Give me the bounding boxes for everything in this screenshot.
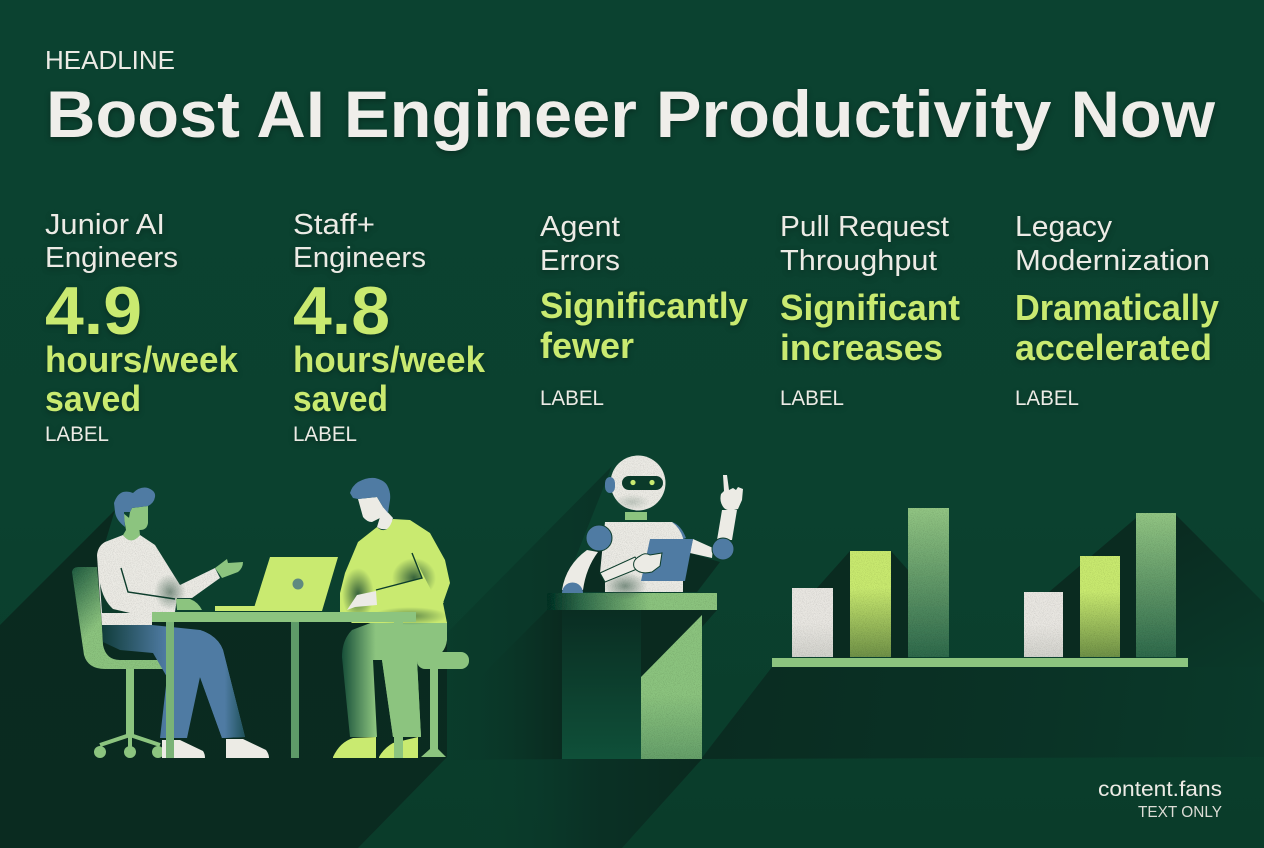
stat: legacy modernization: Modernization (1015, 245, 1210, 277)
stat: pull request throughput: LABEL (780, 387, 844, 410)
stat: staff+ engineers: LABEL (293, 423, 357, 446)
bar shadows (817, 518, 1136, 658)
bar: group one (792, 508, 949, 657)
stat: pull request throughput: Significant (780, 287, 960, 328)
stat: staff+ engineers: 4.8 (293, 273, 390, 349)
lectern (547, 593, 717, 759)
stat: agent errors: Agent (540, 211, 620, 243)
stat: pull request throughput: increases (780, 327, 943, 368)
stat: junior AI engineers: LABEL (45, 423, 109, 446)
stat: legacy modernization: Legacy (1015, 211, 1113, 243)
stat: staff+ engineers (293, 209, 486, 446)
stat: legacy modernization: accelerated (1015, 327, 1212, 368)
stat: junior AI engineers: Junior AI (45, 209, 165, 241)
office chair (72, 567, 165, 758)
right engineer (333, 478, 450, 758)
stat: agent errors: fewer (540, 325, 634, 366)
stat: legacy modernization: LABEL (1015, 387, 1079, 410)
brand footer: TEXT ONLY (1138, 804, 1222, 821)
laptop (215, 557, 338, 611)
stat: junior AI engineers: 4.9 (45, 273, 142, 349)
brand footer (1098, 778, 1222, 821)
brand footer: content.fans (1098, 778, 1222, 801)
stat: pull request throughput: Throughput (780, 245, 937, 277)
stat: junior AI engineers: hours/week (45, 339, 239, 380)
stat: agent errors (540, 211, 748, 410)
stat: agent errors: LABEL (540, 387, 604, 410)
stat: staff+ engineers: hours/week (293, 339, 486, 380)
stat: junior AI engineers: Engineers (45, 242, 178, 274)
stat: agent errors: Significantly (540, 285, 748, 326)
stat: junior AI engineers: saved (45, 378, 141, 419)
illustration: bar charts on a shelf (772, 508, 1188, 667)
stat: junior AI engineers (45, 209, 239, 446)
stat: legacy modernization (1015, 211, 1219, 410)
illustration: robot at a lectern (547, 456, 743, 759)
stool (417, 652, 469, 757)
stat: agent errors: Errors (540, 245, 620, 277)
stat: staff+ engineers: Engineers (293, 242, 426, 274)
table (152, 612, 416, 758)
left engineer (97, 488, 269, 758)
stat: pull request throughput (780, 211, 960, 410)
stat: staff+ engineers: saved (293, 378, 388, 419)
title: Boost AI Engineer Productivity Now (46, 77, 1216, 151)
robot (562, 456, 743, 600)
illustration: two engineers at a table (72, 478, 469, 758)
stat: pull request throughput: Pull Request (780, 211, 949, 243)
bar: group two (1024, 513, 1176, 657)
stat: legacy modernization: Dramatically (1015, 287, 1219, 328)
small headline tag: HEADLINE (45, 45, 175, 75)
shelf (772, 658, 1188, 667)
stat: staff+ engineers: Staff+ (293, 209, 375, 241)
